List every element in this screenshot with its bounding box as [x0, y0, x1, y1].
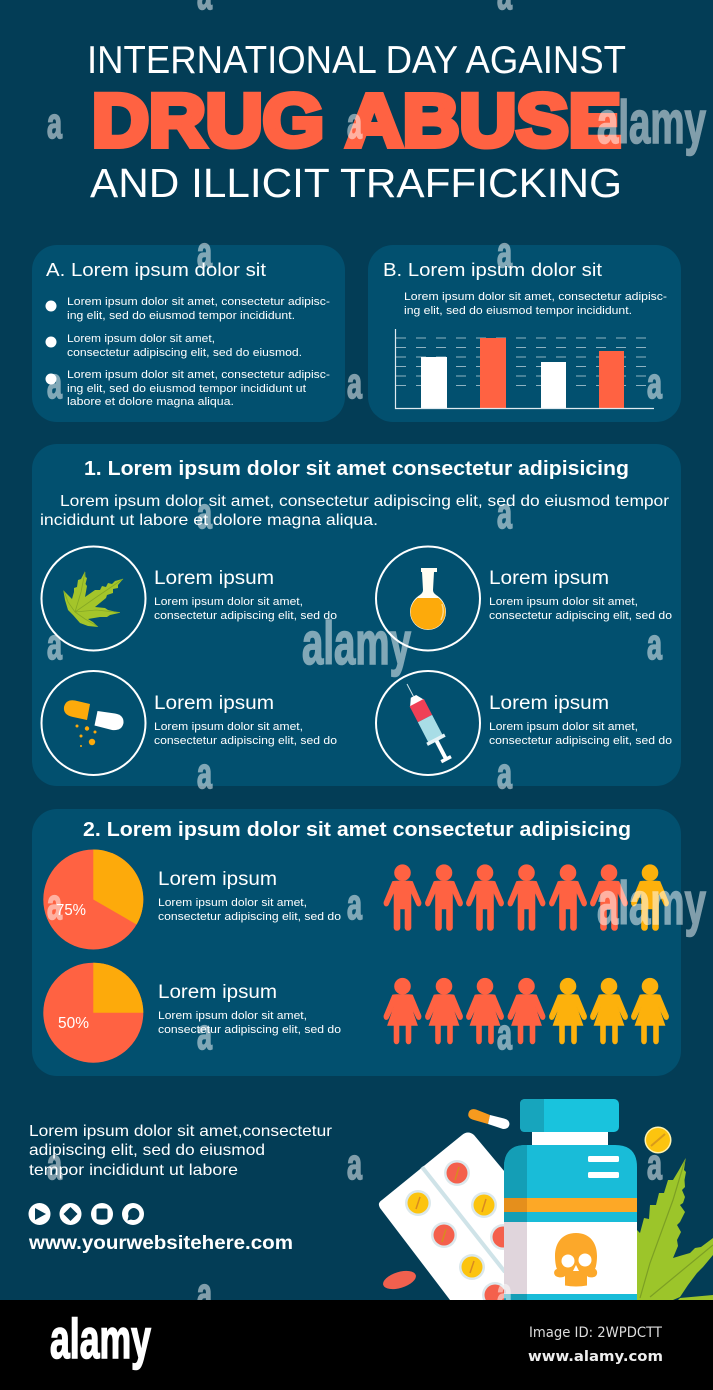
panel: A list: labore et dolore magna aliqua. [67, 396, 234, 408]
title [87, 39, 626, 206]
panel: A list: Lorem ipsum dolor sit amet, consectetur adipisc- [67, 296, 330, 308]
panel: A list: consectetur adipiscing elit, sed do eiusmod. [67, 347, 302, 359]
watermark: a [347, 99, 362, 148]
watermark: a [497, 228, 512, 277]
text: item one: Lorem ipsum dolor sit amet, [154, 596, 303, 608]
panel: A list: Lorem ipsum dolor sit amet, consectetur adipisc- [67, 369, 330, 381]
panel: B chart: ing elit, sed do eiusmod tempor incididunt. [404, 305, 632, 317]
social icons [28, 1203, 144, 1225]
website url: www.yourwebsitehere.com [28, 1233, 293, 1254]
panel: section 1: Lorem ipsum dolor sit amet, consectetur adipiscing elit, sed do eiusmod tempor [60, 493, 670, 510]
text: pie two: Lorem ipsum dolor sit amet, [158, 1010, 307, 1022]
large cannabis leaf [630, 1158, 713, 1300]
watermark: a [347, 880, 362, 929]
image id: Image ID: 2WPDCTT [529, 1325, 662, 1341]
blister pack [379, 1132, 520, 1308]
pie chart: 50% [43, 963, 143, 1063]
text: pie one: consectetur adipiscing elit, sed do [158, 911, 341, 923]
icon: cannabis leaf [42, 546, 146, 650]
text: item four: consectetur adipiscing elit, sed do [489, 735, 672, 747]
icon: syringe [376, 671, 480, 775]
pie chart: 75%: 75% [56, 902, 86, 919]
loose pill [381, 1267, 418, 1293]
panel: section 1: 1. Lorem ipsum dolor sit amet consectetur adipisicing [84, 458, 629, 480]
icon: capsule [42, 671, 146, 775]
footer text: adipiscing elit, sed do eiusmod [29, 1142, 265, 1159]
panel: A list: Lorem ipsum dolor sit amet, [67, 333, 215, 345]
panel: section 1 [32, 444, 681, 786]
text: pie one: Lorem ipsum dolor sit amet, [158, 897, 307, 909]
watermark: a [197, 228, 212, 277]
text: pie one [158, 869, 341, 923]
footer text: tempor incididunt ut labore [29, 1162, 238, 1179]
panel: section 1: incididunt ut labore et dolore magna aliqua. [40, 512, 378, 529]
panel: A list: A. Lorem ipsum dolor sit [46, 260, 266, 280]
watermark: a [497, 1269, 512, 1318]
pie chart: 75% [43, 850, 143, 950]
watermark: a [197, 489, 212, 538]
panel: B chart: B. Lorem ipsum dolor sit [383, 260, 602, 280]
title: AND ILLICIT TRAFFICKING [90, 160, 622, 206]
bar chart [396, 329, 654, 408]
watermark: a [197, 749, 212, 798]
text: item three: Lorem ipsum dolor sit amet, [154, 721, 303, 733]
watermark: a [347, 1140, 362, 1189]
panel: B chart: Lorem ipsum dolor sit amet, consectetur adipisc- [404, 291, 667, 303]
watermark: a [497, 1010, 512, 1059]
title: ABUSE [346, 79, 621, 162]
footer text [29, 1123, 333, 1179]
pie chart: 50%: 50% [58, 1015, 89, 1032]
panel: A list: ing elit, sed do eiusmod tempor incididunt. [67, 310, 295, 322]
text: pie two [158, 982, 341, 1036]
text: item three [154, 693, 337, 747]
text: item three: consectetur adipiscing elit, sed do [154, 735, 337, 747]
text: pie two: consectetur adipiscing elit, sed do [158, 1024, 341, 1036]
text: pie one: Lorem ipsum [158, 869, 277, 890]
footer bar [0, 1300, 713, 1390]
watermark: a [647, 359, 662, 408]
footer text: Lorem ipsum dolor sit amet,consectetur [29, 1123, 333, 1140]
text: item three: Lorem ipsum [154, 693, 274, 714]
watermark: a [47, 620, 62, 669]
pictogram: men [384, 865, 669, 930]
panel: B chart [368, 245, 681, 422]
panel: A list [32, 245, 345, 422]
text: pie two: Lorem ipsum [158, 982, 277, 1003]
illustration: pills and bottle [379, 1099, 713, 1308]
watermark: a [647, 1140, 662, 1189]
watermark: a [47, 880, 62, 929]
text: item one [154, 568, 337, 622]
watermark: a [647, 620, 662, 669]
text: item two [489, 568, 672, 622]
text: item four: Lorem ipsum [489, 693, 609, 714]
text: item two: Lorem ipsum dolor sit amet, [489, 596, 638, 608]
watermark: a [197, 1010, 212, 1059]
watermark: a [497, 749, 512, 798]
alamy logo: alamy [50, 1307, 151, 1370]
coin pill [644, 1126, 672, 1154]
watermark: a [47, 1140, 62, 1189]
icon: skull [554, 1233, 597, 1286]
title: DRUG [92, 79, 324, 162]
alamy url: www.alamy.com [528, 1349, 663, 1365]
watermark: a [197, 1269, 212, 1318]
title: INTERNATIONAL DAY AGAINST [87, 39, 626, 82]
icon: flask [376, 546, 480, 650]
text: item two: Lorem ipsum [489, 568, 609, 589]
watermark: a [47, 359, 62, 408]
text: item four [489, 693, 672, 747]
text: item one: Lorem ipsum [154, 568, 274, 589]
text: item four: Lorem ipsum dolor sit amet, [489, 721, 638, 733]
text: item one: consectetur adipiscing elit, sed do [154, 610, 337, 622]
text: item two: consectetur adipiscing elit, sed do [489, 610, 672, 622]
watermark: alamy [302, 610, 411, 677]
watermark: a [497, 489, 512, 538]
watermark: a [347, 359, 362, 408]
loose capsule [468, 1109, 510, 1129]
watermark: a [47, 99, 62, 148]
panel: section 2 [32, 809, 681, 1076]
pictogram: women [384, 978, 669, 1044]
panel: section 2: 2. Lorem ipsum dolor sit amet consectetur adipisicing [83, 819, 631, 841]
panel: A list: ing elit, sed do eiusmod tempor incididunt ut [67, 383, 306, 395]
poison bottle [504, 1099, 637, 1300]
